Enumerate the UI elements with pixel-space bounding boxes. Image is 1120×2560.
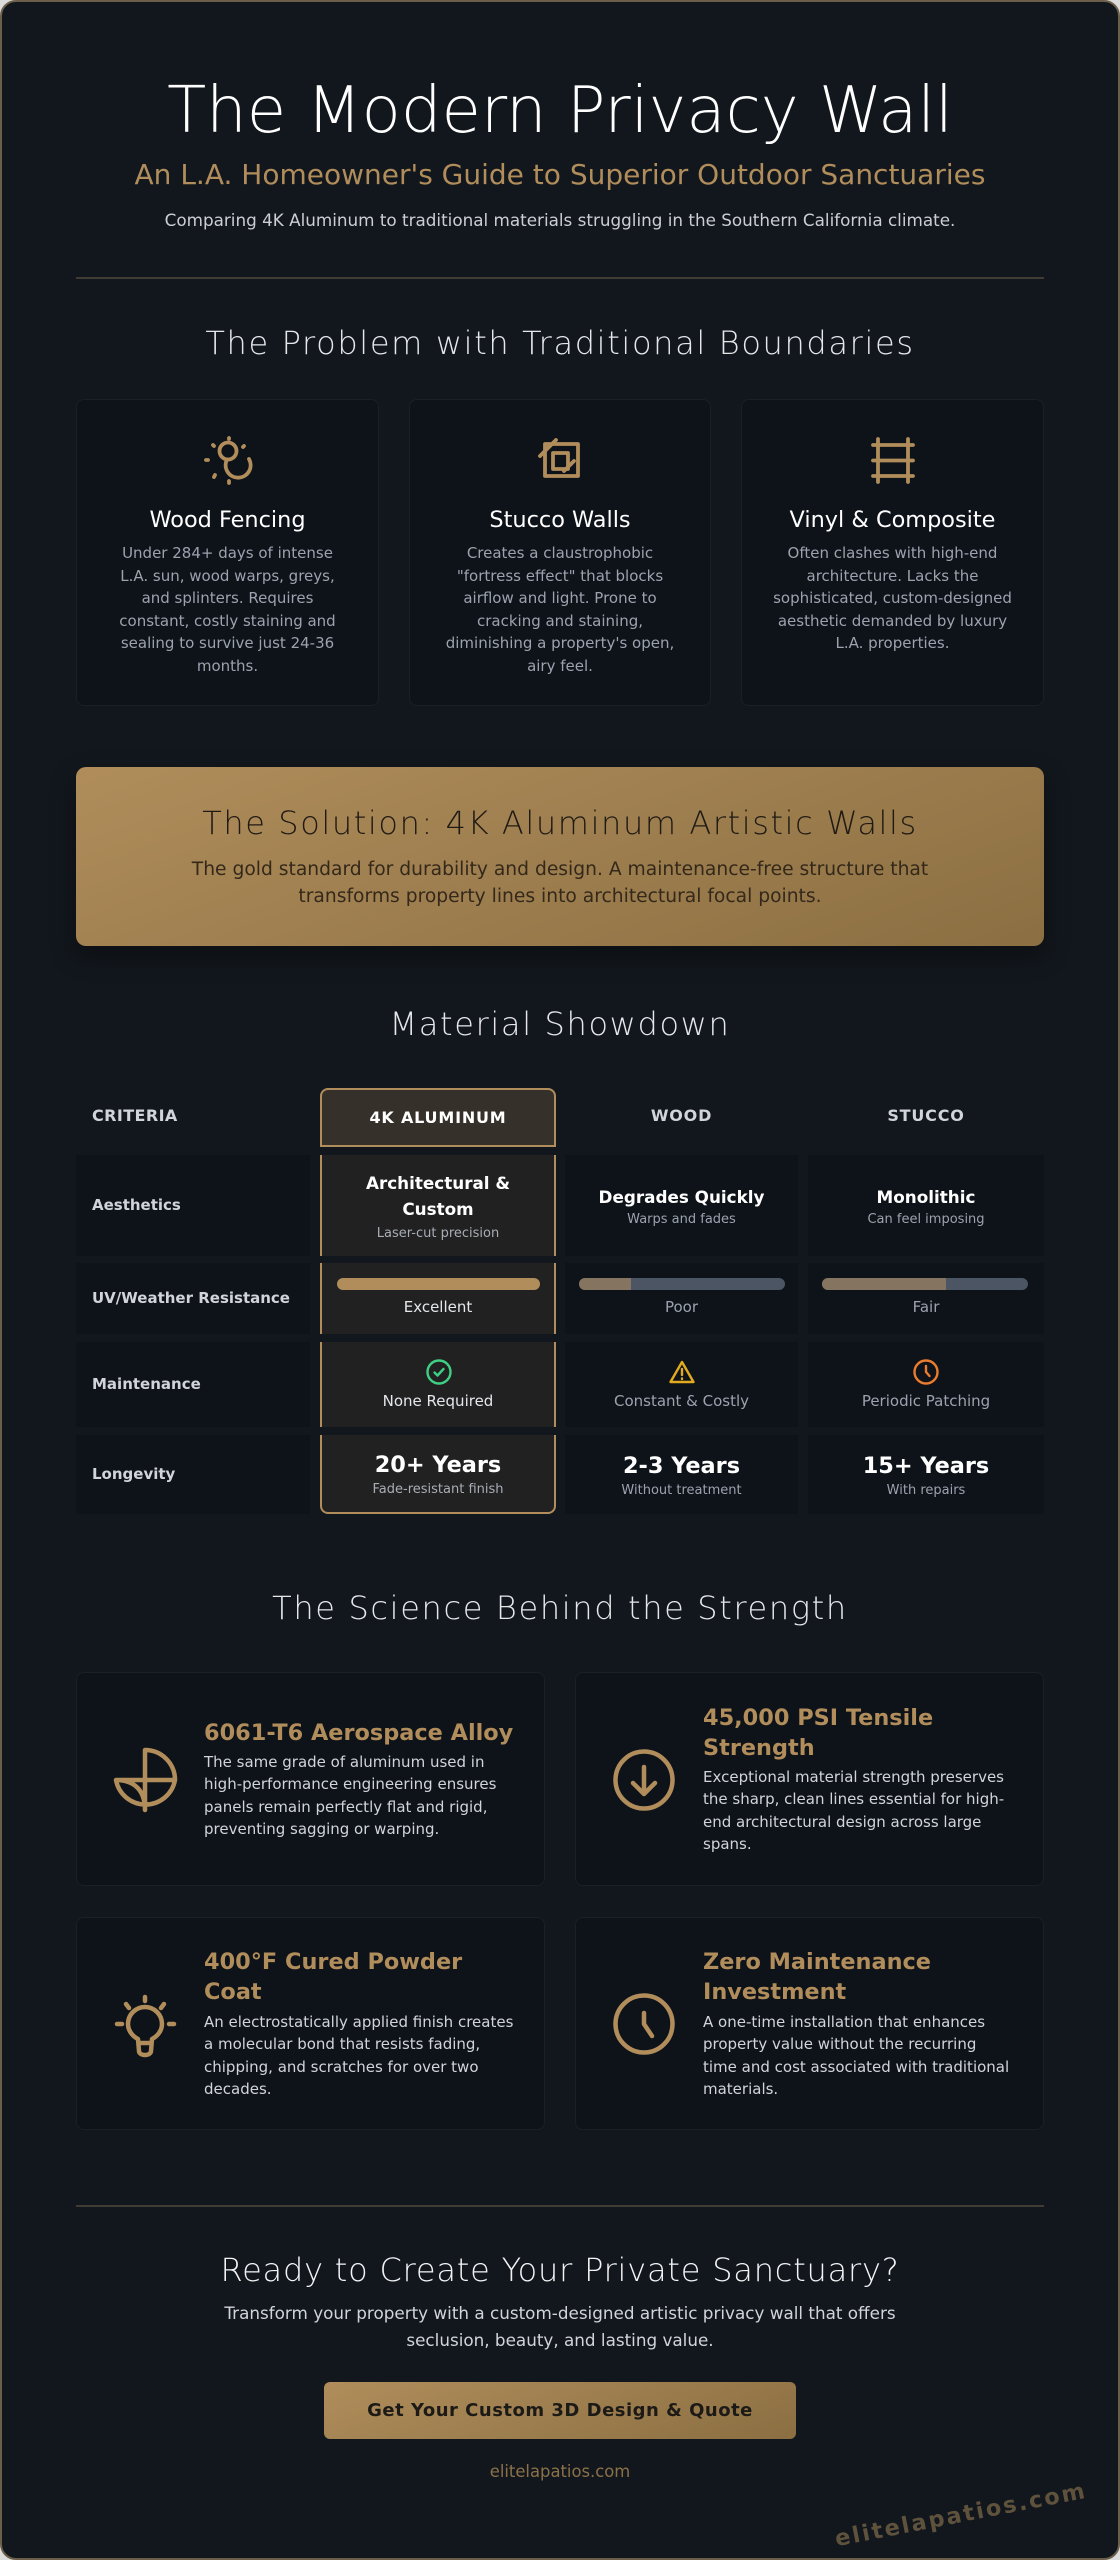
CTA heading: Ready to Create Your Private Sanctuary? bbox=[220, 2251, 900, 2289]
heading: the science: The Science Behind the Strength bbox=[272, 1589, 848, 1627]
row: longevity bbox=[92, 1435, 989, 1514]
card text: architecture. Lacks the bbox=[806, 566, 978, 584]
row: UV weather resistance: UV/Weather Resistance bbox=[92, 1289, 290, 1307]
column header: 4K aluminum: 4K ALUMINUM bbox=[369, 1108, 507, 1126]
text: Exceptional material strength preserves bbox=[703, 1768, 1004, 1786]
text bbox=[204, 1753, 496, 1838]
CTA text bbox=[224, 2303, 896, 2350]
column header: stucco: STUCCO bbox=[887, 1106, 965, 1125]
comparison table bbox=[92, 1088, 1028, 1514]
card text: airy feel. bbox=[527, 656, 593, 674]
text: spans. bbox=[703, 1835, 752, 1853]
text: An electrostatically applied finish creates bbox=[204, 2013, 513, 2031]
icon: wood bbox=[204, 436, 252, 485]
stucco cell with clock icon: Periodic Patching bbox=[862, 1392, 990, 1410]
row: aesthetics bbox=[92, 1155, 985, 1256]
stucco cell with bar bbox=[808, 1263, 1044, 1334]
panel: powder coat bbox=[76, 1917, 545, 2130]
panel: wood fencing bbox=[76, 399, 379, 706]
card title: Wood Fencing bbox=[149, 507, 306, 533]
panel: stucco walls bbox=[409, 399, 711, 706]
stucco cell: Can feel imposing bbox=[867, 1212, 985, 1227]
card text: Under 284+ days of intense bbox=[122, 544, 333, 562]
text: end architectural design across large bbox=[703, 1813, 981, 1831]
aluminum cell with bar bbox=[320, 1263, 556, 1334]
aluminum cell: Architectural & bbox=[366, 1173, 510, 1193]
solution heading: The Solution: 4K Aluminum Artistic Walls bbox=[202, 804, 918, 842]
watermark: elitelapatios.com bbox=[833, 2478, 1089, 2552]
card text: L.A. properties. bbox=[836, 634, 949, 652]
wood cell bbox=[565, 1155, 798, 1256]
title: 400°F Cured Powder bbox=[204, 1949, 462, 1975]
aluminum cell with check icon bbox=[320, 1342, 556, 1427]
card text: diminishing a property's open, bbox=[446, 634, 674, 652]
icon: arrow down circle bbox=[613, 1749, 675, 1811]
aluminum cell with check icon: None Required bbox=[383, 1392, 493, 1410]
stucco cell bbox=[808, 1435, 1044, 1514]
footer call to action bbox=[220, 2251, 900, 2481]
CTA text: Transform your property with a custom-designed artistic privacy wall that offers bbox=[224, 2303, 896, 2323]
card title: Stucco Walls bbox=[489, 507, 631, 533]
title: Investment bbox=[703, 1979, 846, 2005]
icon: alloy bbox=[114, 1748, 178, 1812]
panel: tensile strength bbox=[575, 1672, 1044, 1886]
title: The Modern Privacy Wall bbox=[167, 74, 953, 148]
text: materials. bbox=[703, 2080, 778, 2098]
card text: airflow and light. Prone to bbox=[463, 589, 657, 607]
card text bbox=[773, 544, 1012, 652]
card text: sophisticated, custom-designed bbox=[773, 589, 1012, 607]
wood cell bbox=[565, 1435, 798, 1514]
wood cell: Degrades Quickly bbox=[599, 1187, 764, 1207]
title bbox=[703, 1705, 933, 1761]
card text: L.A. sun, wood warps, greys, bbox=[120, 566, 335, 584]
title bbox=[204, 1949, 462, 2005]
wood cell with bar: Poor bbox=[665, 1298, 698, 1316]
text: decades. bbox=[204, 2080, 272, 2098]
card title: Vinyl & Composite bbox=[790, 507, 995, 533]
panel: aerospace alloy bbox=[76, 1672, 545, 1886]
subtitle: An L.A. Homeowner's Guide to Superior Outdoor Sanctuaries bbox=[135, 158, 985, 190]
text: chipping, and scratches for over two bbox=[204, 2058, 478, 2076]
card text: months. bbox=[197, 656, 258, 674]
icon: light bulb bbox=[114, 1994, 176, 2058]
title: Coat bbox=[204, 1979, 262, 2005]
card text: cracking and staining, bbox=[477, 612, 643, 630]
text: property value without the recurring bbox=[703, 2035, 976, 2053]
icon: stucco bbox=[538, 438, 580, 478]
aluminum cell bbox=[320, 1155, 556, 1256]
card text: sealing to survive just 24-36 bbox=[121, 634, 334, 652]
row: UV weather resistance bbox=[92, 1263, 1028, 1334]
panel: the solution banner bbox=[76, 767, 1044, 946]
panel: vinyl and composite bbox=[741, 399, 1044, 706]
column header: 4K aluminum bbox=[320, 1088, 556, 1147]
text: high-performance engineering ensures bbox=[204, 1775, 496, 1793]
tagline: Comparing 4K Aluminum to traditional materials struggling in the Southern California climate. bbox=[165, 210, 955, 230]
text: the sharp, clean lines essential for high- bbox=[703, 1790, 1004, 1808]
text bbox=[204, 2013, 513, 2098]
aluminum cell: Fade-resistant finish bbox=[372, 1482, 504, 1497]
text: The same grade of aluminum used in bbox=[204, 1753, 484, 1771]
heading: the problem: The Problem with Traditional Boundaries bbox=[205, 324, 915, 362]
aluminum cell: Laser-cut precision bbox=[377, 1226, 499, 1240]
card text: Creates a claustrophobic bbox=[467, 544, 653, 562]
title: 45,000 PSI Tensile bbox=[703, 1705, 933, 1731]
CTA button: Get Your Custom 3D Design & Quote bbox=[367, 2400, 753, 2421]
row: maintenance: Maintenance bbox=[92, 1375, 201, 1393]
stucco cell: Monolithic bbox=[877, 1187, 975, 1207]
solution text: The gold standard for durability and design. A maintenance-free structure that bbox=[192, 859, 928, 880]
stucco cell with clock icon bbox=[808, 1342, 1044, 1427]
wood cell: 2-3 Years bbox=[623, 1453, 740, 1479]
row: longevity: Longevity bbox=[92, 1465, 175, 1483]
column header: wood: WOOD bbox=[651, 1106, 712, 1125]
title: Strength bbox=[703, 1735, 815, 1761]
heading: material showdown: Material Showdown bbox=[390, 1005, 730, 1043]
stucco cell: With repairs bbox=[887, 1483, 965, 1498]
stucco cell: 15+ Years bbox=[863, 1453, 989, 1479]
wood cell with bar bbox=[565, 1263, 798, 1334]
solution text: transforms property lines into architectural focal points. bbox=[298, 886, 822, 906]
website link: elitelapatios.com bbox=[490, 2462, 630, 2481]
stucco cell with bar: Fair bbox=[913, 1298, 939, 1316]
card text: constant, costly staining and bbox=[119, 612, 336, 630]
CTA text: seclusion, beauty, and lasting value. bbox=[406, 2330, 714, 2350]
stucco cell bbox=[808, 1155, 1044, 1256]
wood cell: Without treatment bbox=[621, 1483, 742, 1498]
text: A one-time installation that enhances bbox=[703, 2013, 985, 2031]
card text bbox=[119, 544, 336, 674]
aluminum cell bbox=[320, 1435, 556, 1514]
header bbox=[134, 74, 985, 230]
card text bbox=[446, 544, 674, 674]
wood cell with warning icon bbox=[565, 1342, 798, 1427]
card text: "fortress effect" that blocks bbox=[457, 566, 663, 584]
solution text bbox=[192, 859, 928, 906]
title bbox=[703, 1949, 931, 2005]
column header: criteria: CRITERIA bbox=[92, 1106, 178, 1125]
text: panels remain perfectly flat and rigid, bbox=[204, 1798, 487, 1816]
wood cell: Warps and fades bbox=[627, 1212, 736, 1227]
card text: aesthetic demanded by luxury bbox=[778, 612, 1007, 630]
card text: and splinters. Requires bbox=[142, 589, 313, 607]
aluminum cell with bar: Excellent bbox=[404, 1298, 472, 1316]
wood cell with warning icon: Constant & Costly bbox=[614, 1392, 749, 1410]
icon: vinyl bbox=[871, 437, 915, 484]
text: time and cost associated with traditional bbox=[703, 2058, 1009, 2076]
title: 6061-T6 Aerospace Alloy bbox=[204, 1720, 513, 1746]
icon: clock bbox=[613, 1993, 675, 2055]
card text: Often clashes with high-end bbox=[788, 544, 997, 562]
text: preventing sagging or warping. bbox=[204, 1820, 439, 1838]
text bbox=[703, 1768, 1004, 1853]
row: aesthetics: Aesthetics bbox=[92, 1196, 181, 1214]
panel: zero maintenance bbox=[575, 1917, 1044, 2130]
text bbox=[703, 2013, 1009, 2098]
row: maintenance bbox=[92, 1342, 990, 1427]
CTA button bbox=[324, 2382, 796, 2439]
aluminum cell: 20+ Years bbox=[375, 1452, 501, 1478]
title: Zero Maintenance bbox=[703, 1949, 931, 1975]
text: a molecular bond that resists fading, bbox=[204, 2035, 480, 2053]
aluminum cell: Custom bbox=[402, 1199, 474, 1219]
